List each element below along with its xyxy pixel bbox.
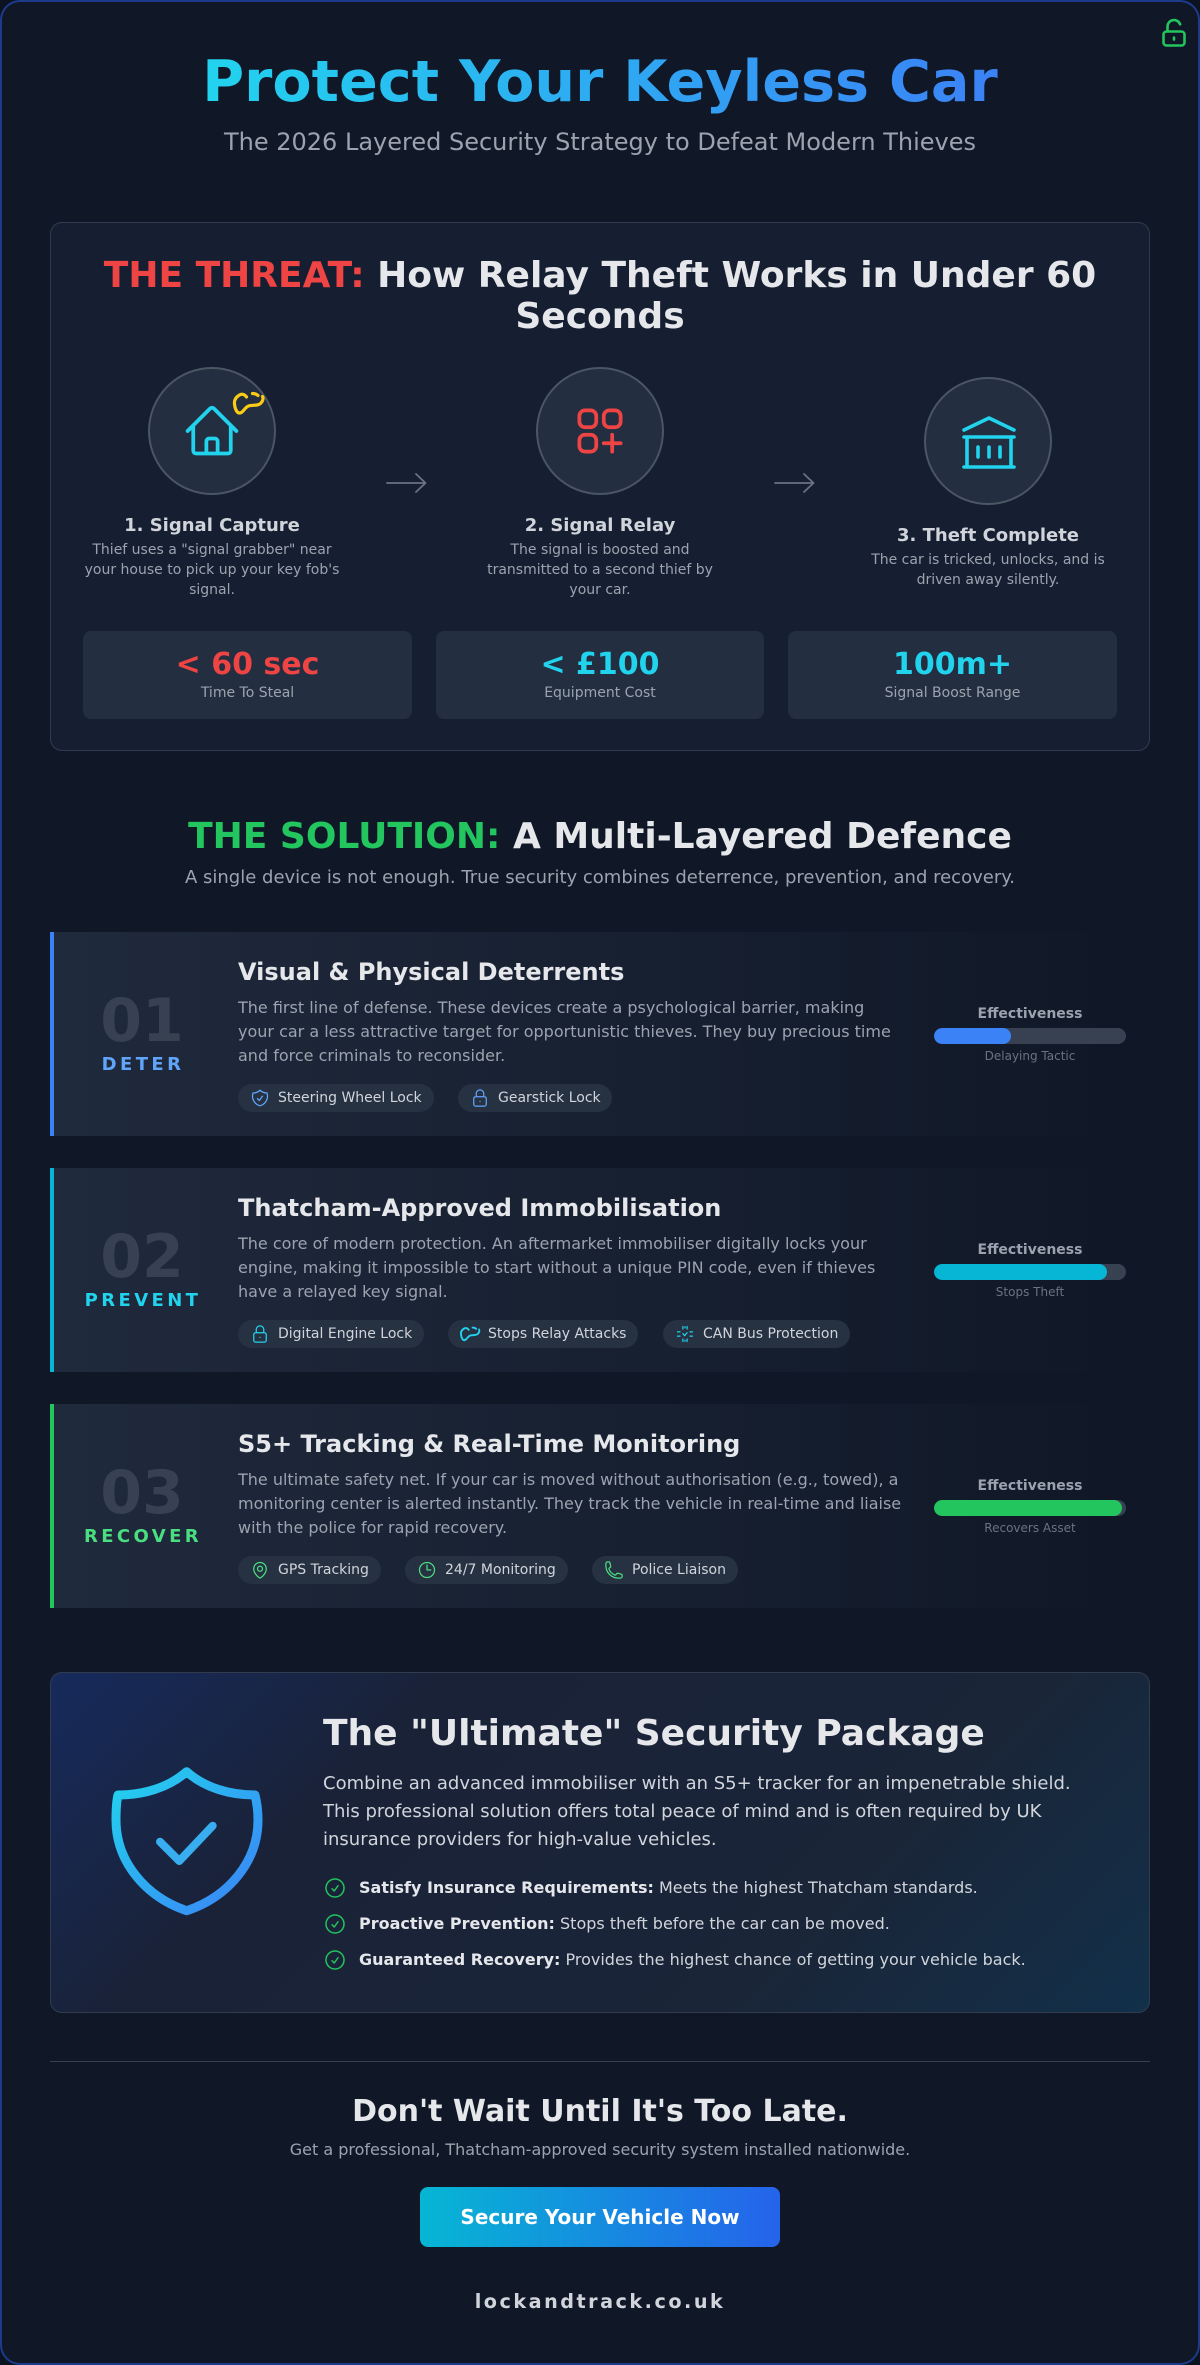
stat: signal boost range: 100m+ (893, 647, 1012, 682)
stat: equipment cost: Equipment Cost (544, 685, 656, 701)
icon: house with signal (148, 367, 276, 495)
chip: gps tracking: GPS Tracking (278, 1562, 369, 1578)
heading: the solution: THE SOLUTION: A Multi-Layered Defence (188, 816, 1012, 856)
chip: can bus protection (663, 1320, 850, 1348)
step title: 3. Theft Complete (897, 525, 1079, 546)
step description: your car. (569, 582, 631, 598)
benefit: insurance: Satisfy Insurance Requirements: Meets the highest Thatcham standards. (359, 1878, 978, 1897)
layer description: The ultimate safety net. If your car is moved without authorisation (e.g., towed), a (238, 1470, 898, 1488)
package description: insurance providers for high-value vehicles. (323, 1829, 717, 1850)
panel: layer 01 deter (50, 932, 1150, 1136)
step title: 2. Signal Relay (525, 515, 675, 536)
step description: The signal is boosted and (510, 542, 690, 558)
call to action (50, 2061, 1150, 2247)
effectiveness meter (934, 1478, 1126, 1535)
chip: steering wheel lock (238, 1084, 434, 1112)
layer description: engine, making it impossible to start without a unique PIN code, even if thieves (238, 1258, 875, 1276)
tag recover: RECOVER (84, 1526, 202, 1547)
cta heading: Don't Wait Until It's Too Late. (352, 2094, 848, 2129)
heading: threat: THE THREAT: How Relay Theft Works in Under 60 (104, 254, 1096, 296)
package description (322, 1773, 1071, 1850)
cta button: Secure Your Vehicle Now (460, 2205, 740, 2229)
chip: gearstick lock: Gearstick Lock (498, 1090, 601, 1106)
arrow: step 2 to 3 (774, 473, 814, 493)
step 2: signal relay (487, 367, 713, 598)
stat: signal boost range: Signal Boost Range (885, 685, 1020, 701)
step description (871, 552, 1105, 588)
effectiveness meter: Recovers Asset (984, 1521, 1076, 1535)
chip: 24/7 monitoring (405, 1556, 568, 1584)
step description: your house to pick up your key fob's (85, 562, 339, 578)
title: Protect Your Keyless Car (202, 49, 998, 115)
tag prevent: PREVENT (85, 1290, 201, 1311)
package title: The "Ultimate" Security Package (323, 1712, 985, 1754)
step description: The car is tricked, unlocks, and is (871, 552, 1105, 568)
chip: 24/7 monitoring: 24/7 Monitoring (445, 1562, 556, 1578)
chip: gps tracking (238, 1556, 381, 1584)
cta text: Get a professional, Thatcham-approved security system installed nationwide. (290, 2140, 910, 2159)
layer title: S5+ Tracking & Real-Time Monitoring (238, 1430, 740, 1458)
step description: Thief uses a "signal grabber" near (92, 542, 332, 558)
effectiveness meter: Effectiveness (978, 1006, 1082, 1022)
layer description: The core of modern protection. An aftermarket immobiliser digitally locks your (238, 1234, 867, 1252)
package description: Combine an advanced immobiliser with an S5+ tracker for an impenetrable shield. (323, 1773, 1071, 1794)
icon: shield with check (112, 1767, 262, 1916)
icon: squares plus (536, 367, 664, 495)
effectiveness meter: Effectiveness (978, 1242, 1082, 1258)
stat: signal boost range (788, 631, 1117, 719)
effectiveness meter (934, 1006, 1126, 1063)
layer description (238, 1470, 901, 1536)
layer description: The first line of defense. These devices create a psychological barrier, making (238, 998, 864, 1016)
chip: stops relay attacks: Stops Relay Attacks (488, 1326, 626, 1342)
chip: gearstick lock (458, 1084, 612, 1112)
step description (85, 542, 339, 598)
benefit: recovery: Guaranteed Recovery: Provides the highest chance of getting your vehicle back. (359, 1950, 1026, 1969)
step description: transmitted to a second thief by (487, 562, 713, 578)
effectiveness meter (934, 1242, 1126, 1299)
arrow: step 1 to 2 (386, 473, 426, 493)
stat: time to steal (83, 631, 412, 719)
number 03: 03 (100, 1458, 184, 1528)
number 02: 02 (100, 1222, 184, 1292)
heading: threat (104, 254, 1096, 336)
layer description (238, 998, 891, 1064)
chip: stops relay attacks (448, 1320, 638, 1348)
layer description: have a relayed key signal. (238, 1282, 448, 1300)
icon: building (924, 377, 1052, 505)
chip: police liaison: Police Liaison (632, 1562, 726, 1578)
solution subtitle: A single device is not enough. True security combines deterrence, prevention, and recovery. (185, 867, 1015, 888)
subtitle: The 2026 Layered Security Strategy to Defeat Modern Thieves (224, 128, 976, 156)
layer description: monitoring center is alerted instantly. They track the vehicle in real-time and liaise (238, 1494, 901, 1512)
stat: time to steal: < 60 sec (176, 647, 319, 682)
chip: police liaison (592, 1556, 738, 1584)
number 01: 01 (100, 986, 184, 1056)
chip: steering wheel lock: Steering Wheel Lock (278, 1090, 422, 1106)
step description: signal. (189, 582, 235, 598)
layer description: and force criminals to reconsider. (238, 1046, 505, 1064)
benefit: prevention: Proactive Prevention: Stops theft before the car can be moved. (359, 1914, 890, 1933)
stat: equipment cost: < £100 (540, 647, 660, 682)
effectiveness meter: Delaying Tactic (985, 1049, 1075, 1063)
step 3: theft complete (871, 377, 1105, 588)
effectiveness meter: Effectiveness (978, 1478, 1082, 1494)
chip: digital engine lock: Digital Engine Lock (278, 1326, 412, 1342)
layer description: your car a less attractive target for opportunistic thieves. They buy precious time (238, 1022, 891, 1040)
step description: driven away silently. (917, 572, 1059, 588)
panel: ultimate security package (50, 1672, 1150, 2013)
cta button (420, 2187, 780, 2247)
stat: equipment cost (436, 631, 764, 719)
tag deter: DETER (102, 1054, 184, 1075)
package description: This professional solution offers total peace of mind and is often required by UK (323, 1801, 1041, 1822)
chip: digital engine lock (238, 1320, 424, 1348)
panel: layer 03 recover (50, 1404, 1150, 1608)
layer title: Visual & Physical Deterrents (238, 958, 624, 986)
layer description: with the police for rapid recovery. (238, 1518, 507, 1536)
step description (487, 542, 713, 598)
footer url: lockandtrack.co.uk (475, 2290, 725, 2313)
layer title: Thatcham-Approved Immobilisation (238, 1194, 721, 1222)
heading: threat: Seconds (515, 296, 685, 336)
step 1: signal capture (85, 367, 339, 598)
icon: open padlock (1162, 18, 1186, 47)
step title: 1. Signal Capture (124, 515, 300, 536)
layer description (238, 1234, 875, 1300)
panel: the threat (50, 222, 1150, 751)
chip: can bus protection: CAN Bus Protection (703, 1326, 838, 1342)
effectiveness meter: Stops Theft (996, 1285, 1064, 1299)
stat: time to steal: Time To Steal (201, 685, 294, 701)
panel: layer 02 prevent (50, 1168, 1150, 1372)
